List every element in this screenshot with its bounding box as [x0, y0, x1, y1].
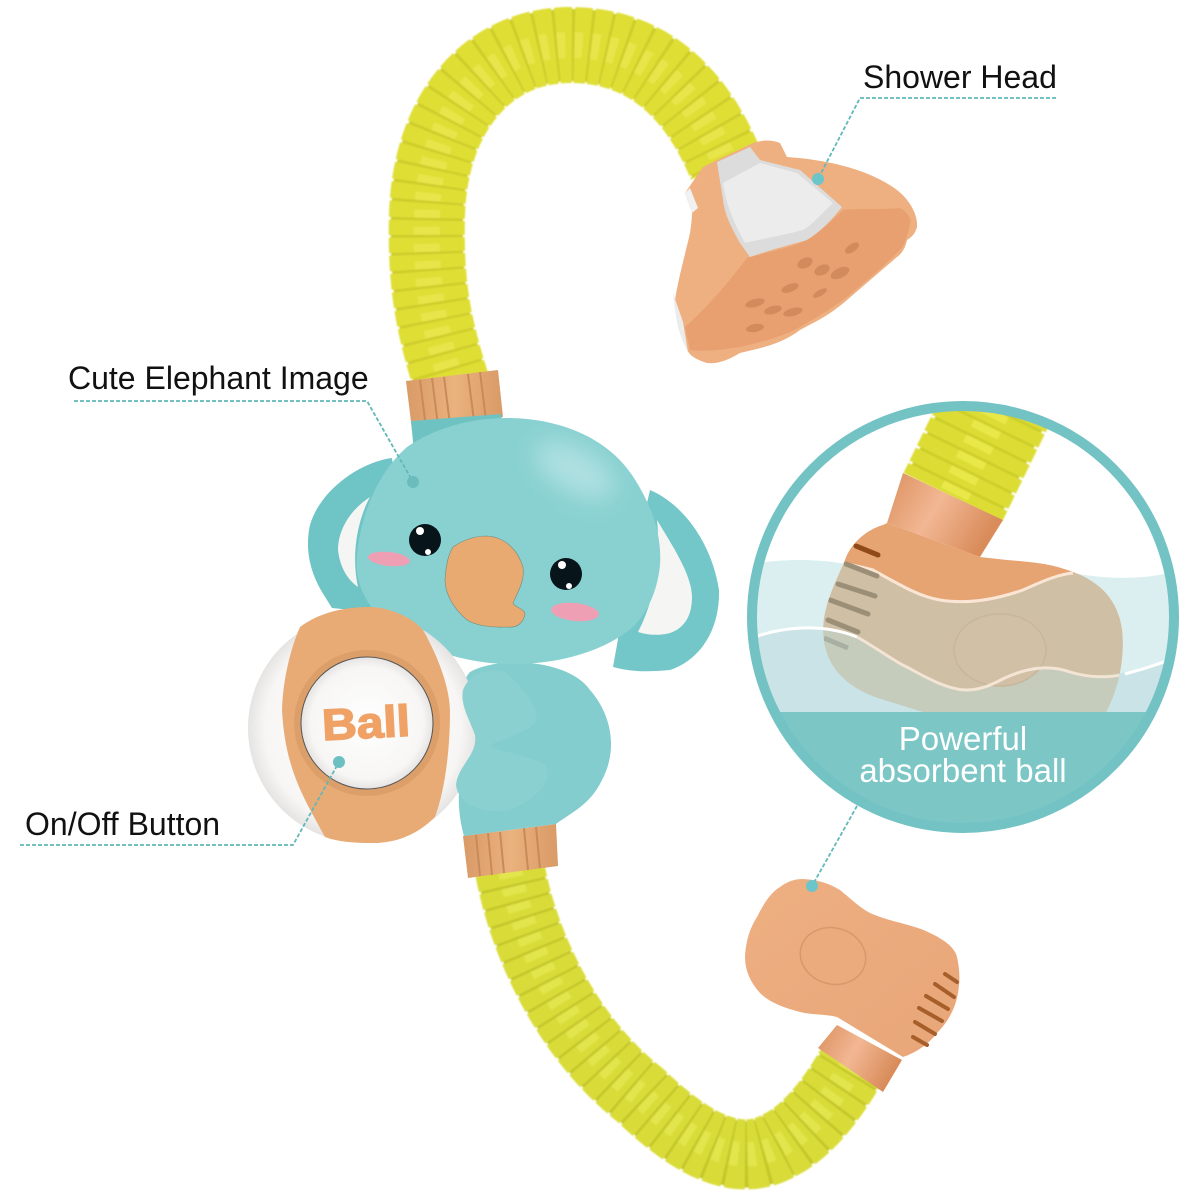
hose in circle [953, 380, 1010, 497]
hose connector top [406, 370, 503, 430]
text: Powerful absorbent ball: absorbent ball [859, 752, 1067, 789]
body [459, 662, 611, 836]
arm [456, 671, 548, 811]
right eye [550, 558, 582, 590]
left ear [308, 458, 400, 612]
elephant [248, 414, 719, 843]
left eye [409, 524, 441, 556]
shower head [673, 140, 917, 363]
submerged nozzle [823, 523, 1123, 714]
text: Powerful absorbent ball: Powerful [899, 720, 1027, 757]
label: On/Off Button [20, 756, 345, 845]
wave line [755, 628, 857, 637]
neck top [411, 414, 503, 452]
text: Ball: Ball [321, 697, 411, 750]
label: Cute Elephant Image [68, 360, 419, 488]
right ear [613, 490, 719, 671]
lower yellow hose [510, 870, 855, 1154]
water [757, 560, 1169, 674]
head [357, 418, 660, 664]
label: On/Off Button: On/Off Button [25, 806, 220, 842]
label: Shower Head: Shower Head [863, 59, 1057, 95]
cheeks [367, 550, 600, 623]
label: Cute Elephant Image: Cute Elephant Image [68, 360, 369, 396]
feature circle [750, 380, 1180, 837]
label: Shower Head [812, 59, 1057, 185]
text: Powerful absorbent ball [859, 720, 1067, 789]
neck [887, 473, 1003, 557]
head highlight [530, 433, 620, 507]
upper yellow hose [427, 45, 726, 385]
absorbent ball [745, 879, 959, 1092]
hose connector bottom [463, 824, 558, 878]
trunk [445, 536, 525, 627]
ball with button [248, 607, 478, 843]
callout line to absorbent ball [806, 806, 857, 892]
